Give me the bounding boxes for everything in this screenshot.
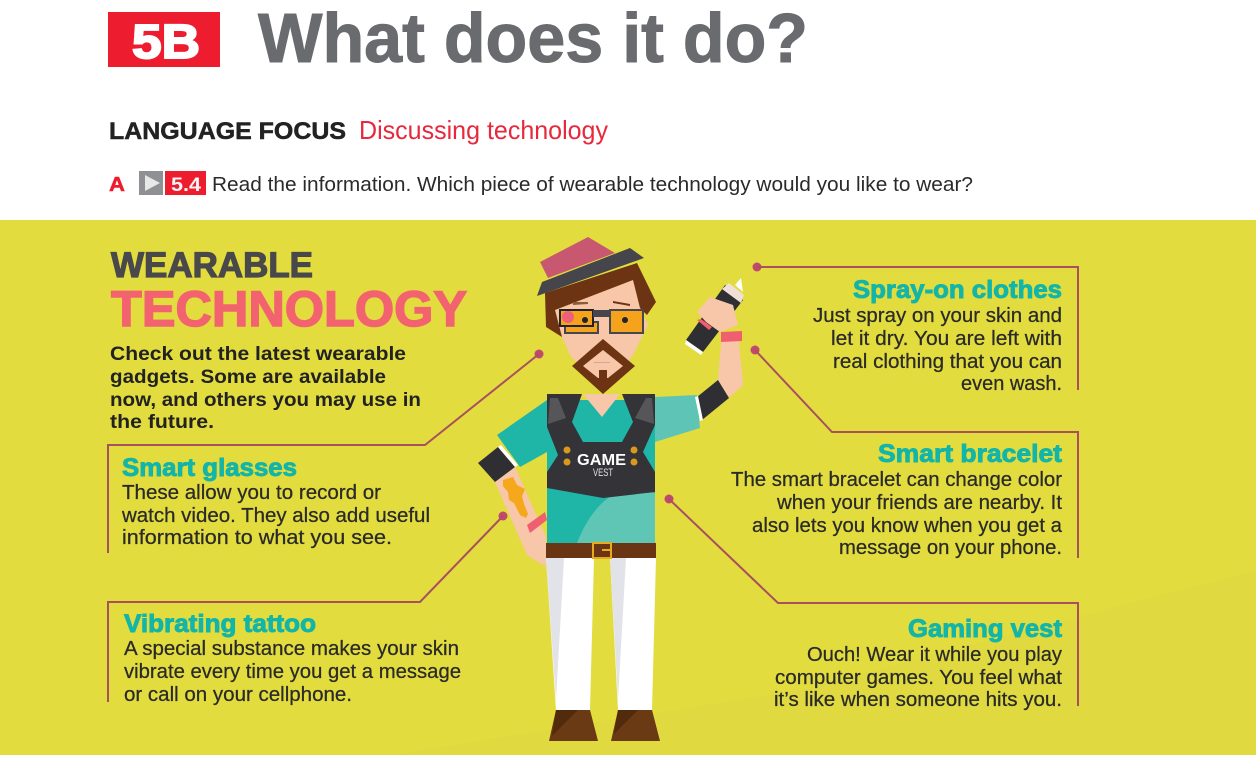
legs bbox=[546, 558, 656, 710]
callout: spray-on clothes: Just spray on your skin and bbox=[813, 305, 1062, 327]
callout: smart glasses: information to what you see. bbox=[122, 527, 392, 549]
smart glasses bbox=[560, 310, 643, 333]
belt bbox=[546, 543, 656, 558]
callout: spray-on clothes: even wash. bbox=[961, 373, 1062, 395]
callout: vibrating tattoo: Vibrating tattoo bbox=[124, 610, 316, 638]
audio track number bbox=[165, 171, 206, 196]
callout: smart glasses: These allow you to record or bbox=[122, 482, 381, 504]
panel: wearable technology bbox=[0, 220, 1256, 755]
callout: smart bracelet: message on your phone. bbox=[839, 537, 1062, 559]
intro text bbox=[110, 343, 421, 433]
exercise instruction: A bbox=[109, 174, 125, 196]
callout: smart glasses bbox=[108, 350, 544, 553]
callout: vibrating tattoo bbox=[108, 512, 508, 706]
callout: smart bracelet: also lets you know when you get a bbox=[752, 515, 1063, 537]
callout: spray-on clothes bbox=[752, 262, 1078, 395]
intro text: the future. bbox=[110, 411, 214, 433]
callout: gaming vest bbox=[664, 494, 1078, 711]
section heading: LANGUAGE FOCUS bbox=[109, 118, 346, 145]
audio track number: 5.4 bbox=[171, 175, 201, 196]
gaming vest: VEST bbox=[593, 467, 613, 479]
title: What does it do? bbox=[258, 0, 808, 77]
intro text: now, and others you may use in bbox=[110, 389, 421, 411]
illustration: man wearing gadgets bbox=[478, 237, 744, 741]
callout: smart bracelet: Smart bracelet bbox=[878, 440, 1063, 468]
page header bbox=[108, 0, 973, 196]
section heading: Discussing technology bbox=[359, 115, 608, 145]
callout: smart glasses: Smart glasses bbox=[122, 454, 297, 482]
lesson badge 5B bbox=[108, 12, 220, 69]
hat bbox=[537, 237, 644, 296]
gaming vest bbox=[547, 394, 655, 498]
panel heading: TECHNOLOGY bbox=[111, 281, 467, 337]
callout: smart bracelet bbox=[731, 346, 1078, 559]
callout: gaming vest: it’s like when someone hits you. bbox=[774, 689, 1062, 711]
callout: spray-on clothes: Spray-on clothes bbox=[853, 276, 1062, 304]
callout: smart glasses: watch video. They also add useful bbox=[121, 505, 430, 527]
icon: audio play bbox=[139, 171, 163, 195]
callout: smart bracelet: The smart bracelet can change color bbox=[731, 469, 1062, 491]
gaming vest: GAME bbox=[577, 452, 626, 469]
callout: vibrating tattoo: vibrate every time you get a message bbox=[124, 661, 461, 683]
callout: gaming vest: Gaming vest bbox=[908, 615, 1063, 643]
head bbox=[545, 263, 656, 394]
panel heading: WEARABLE bbox=[111, 246, 313, 285]
panel heading bbox=[111, 246, 467, 337]
torso bbox=[497, 394, 700, 543]
callout: gaming vest: computer games. You feel what bbox=[775, 667, 1062, 689]
intro text: Check out the latest wearable bbox=[110, 343, 406, 365]
callout: spray-on clothes: let it dry. You are left with bbox=[831, 328, 1062, 350]
exercise instruction: Read the information. Which piece of wearable technology would you like to wear? bbox=[212, 173, 973, 196]
left arm bbox=[478, 445, 547, 567]
callout: spray-on clothes: real clothing that you can bbox=[833, 351, 1062, 373]
shoes bbox=[549, 710, 660, 741]
callout: vibrating tattoo: A special substance makes your skin bbox=[124, 638, 459, 660]
callout: vibrating tattoo: or call on your cellphone. bbox=[124, 684, 352, 706]
right arm and spray can bbox=[685, 278, 744, 421]
callout: smart bracelet: when your friends are nearby. It bbox=[776, 492, 1062, 514]
lesson badge 5B: 5B bbox=[132, 16, 200, 69]
intro text: gadgets. Some are available bbox=[110, 366, 386, 388]
callout: gaming vest: Ouch! Wear it while you play bbox=[807, 644, 1062, 666]
section heading bbox=[109, 115, 608, 145]
